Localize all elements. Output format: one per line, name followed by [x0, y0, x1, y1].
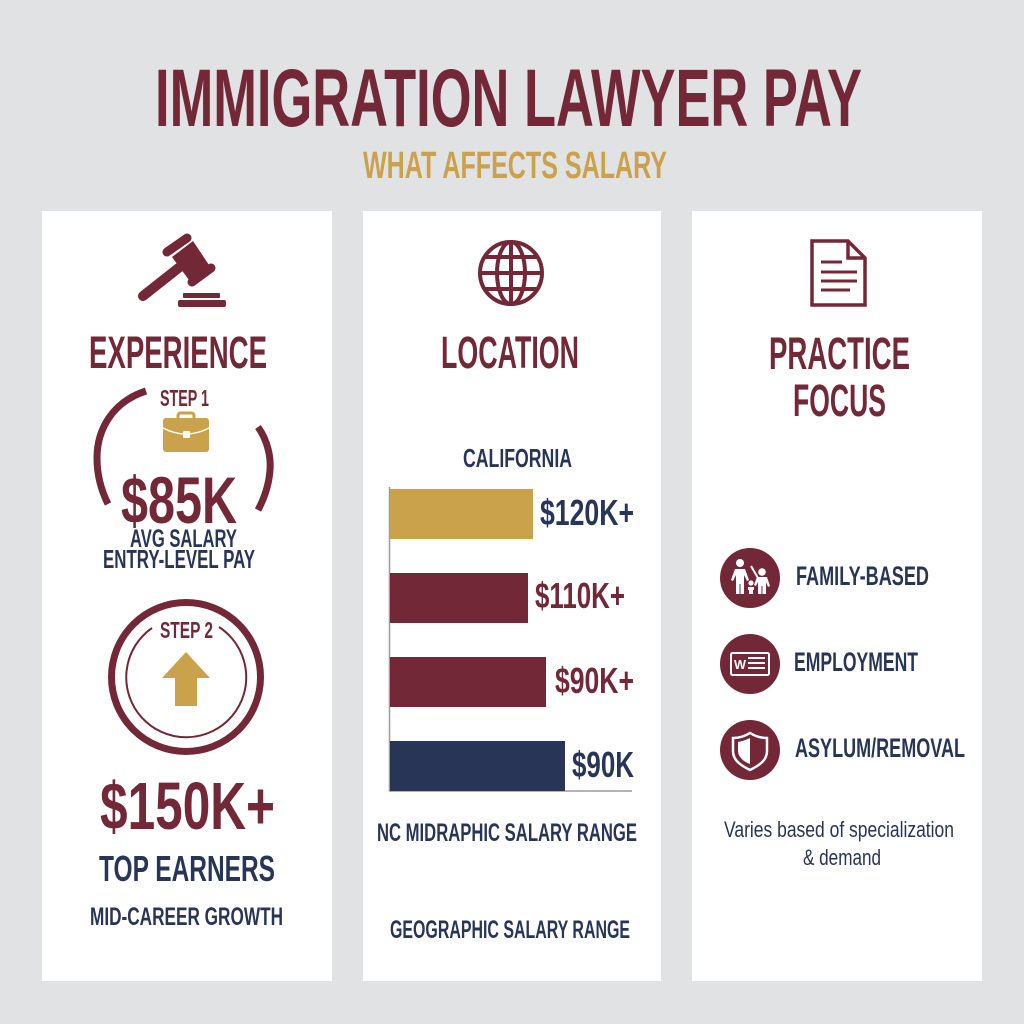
step 2 badge: [112, 602, 260, 752]
item: employment: EMPLOYMENT: [794, 647, 918, 677]
heading: practice focus: FOCUS: [793, 375, 886, 426]
panel: practice focus: [692, 211, 982, 981]
icon: document: [812, 241, 865, 305]
note text: [724, 817, 954, 870]
item: employment: [720, 634, 918, 694]
heading: practice focus: [769, 328, 910, 426]
heading: location: LOCATION: [441, 327, 579, 378]
entry salary value: $85K: [121, 463, 237, 537]
step 1 arcs: [97, 391, 270, 510]
top earners label: TOP EARNERS: [99, 848, 275, 889]
entry-level pay label: ENTRY-LEVEL PAY: [103, 544, 255, 574]
bar 4: $90K: [572, 744, 634, 785]
icon: work card: W: [734, 657, 747, 672]
bar 1: [390, 489, 634, 539]
icon: gavel: [143, 238, 226, 307]
bar 3: $90K+: [555, 660, 634, 701]
bar 1: $120K+: [540, 492, 634, 533]
avg salary label: AVG SALARY: [130, 525, 237, 553]
bar 2: [390, 573, 625, 623]
california label: CALIFORNIA: [463, 443, 572, 473]
item: family-based: [720, 548, 929, 608]
note text: & demand: [803, 845, 881, 870]
bar chart: [390, 487, 634, 791]
item: family-based: FAMILY-BASED: [796, 561, 929, 591]
chart caption: NC MIDRAPHIC SALARY RANGE: [377, 819, 637, 847]
icon: work card: [731, 653, 769, 675]
heading: practice focus: PRACTICE: [769, 328, 910, 379]
mid-career growth label: MID-CAREER GROWTH: [90, 903, 283, 931]
bar 3: [390, 657, 634, 707]
step 1 label: STEP 1: [160, 385, 209, 411]
subtitle: WHAT AFFECTS SALARY: [363, 145, 667, 187]
icon: family: [731, 559, 770, 594]
heading: experience: EXPERIENCE: [89, 327, 267, 378]
bar 4: [390, 741, 634, 791]
panel: experience: [42, 211, 332, 981]
item: asylum/removal: [720, 720, 965, 780]
geographic salary range label: GEOGRAPHIC SALARY RANGE: [390, 916, 630, 944]
icon: briefcase: [163, 413, 209, 452]
bar 2: $110K+: [535, 575, 625, 616]
top salary value: $150K+: [100, 769, 275, 844]
panel: location: [363, 211, 661, 981]
icon: shield: [733, 733, 767, 770]
icon: globe: [480, 242, 542, 304]
icon: up arrow: [162, 652, 210, 706]
note text: Varies based of specialization: [724, 817, 954, 842]
step 2 badge: STEP 2: [160, 617, 213, 643]
